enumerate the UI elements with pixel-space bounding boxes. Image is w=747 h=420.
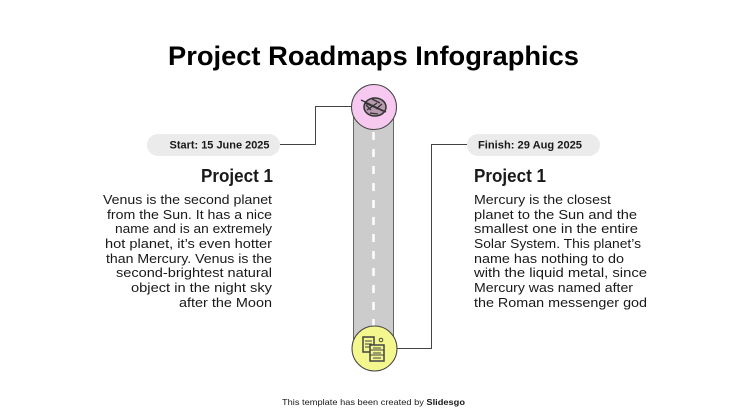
text block: right description: name has nothing to do (474, 251, 624, 266)
text block: left description (103, 192, 273, 310)
text block: right description (473, 192, 647, 310)
text block: right description: the Roman messenger god (474, 295, 647, 310)
text block: left description: second-brightest natural (116, 265, 272, 280)
text block: left description: than Mercury. Venus is the (106, 251, 272, 266)
text block: left description: hot planet, it’s even hotter (105, 236, 273, 251)
connector: finish (397, 144, 467, 348)
text block: right description: smallest one in the entire (474, 221, 638, 236)
pill: finish date (467, 134, 600, 156)
text block: right description: planet to the Sun and the (474, 207, 637, 222)
text block: left description: after the Moon (179, 295, 272, 310)
icon: finish documents badge (352, 326, 397, 371)
connector: start (280, 106, 353, 144)
text block: right description: Mercury was named after (474, 280, 634, 295)
text block: left description: name and is an extremely (115, 221, 272, 236)
text block: left description: from the Sun. It has a nice (107, 207, 272, 222)
icon: start planet badge (352, 84, 396, 130)
text block: left description: Venus is the second planet (103, 192, 272, 207)
text block: right description: Solar System. This planet’s (474, 236, 641, 251)
footer credit: This template has been created by Slidesgo (282, 397, 465, 407)
text block: right description: Mercury is the closest (474, 192, 611, 207)
title: Project Roadmaps Infographics (168, 41, 579, 71)
heading: right project: Project 1 (474, 166, 546, 186)
road (354, 110, 394, 350)
pill: start date: Start: 15 June 2025 (170, 140, 270, 152)
pill: finish date: Finish: 29 Aug 2025 (478, 140, 582, 152)
text block: right description: with the liquid metal, since (473, 265, 647, 280)
heading: left project: Project 1 (201, 166, 273, 186)
pill: start date (147, 134, 280, 156)
text block: left description: object in the night sky (131, 280, 272, 295)
